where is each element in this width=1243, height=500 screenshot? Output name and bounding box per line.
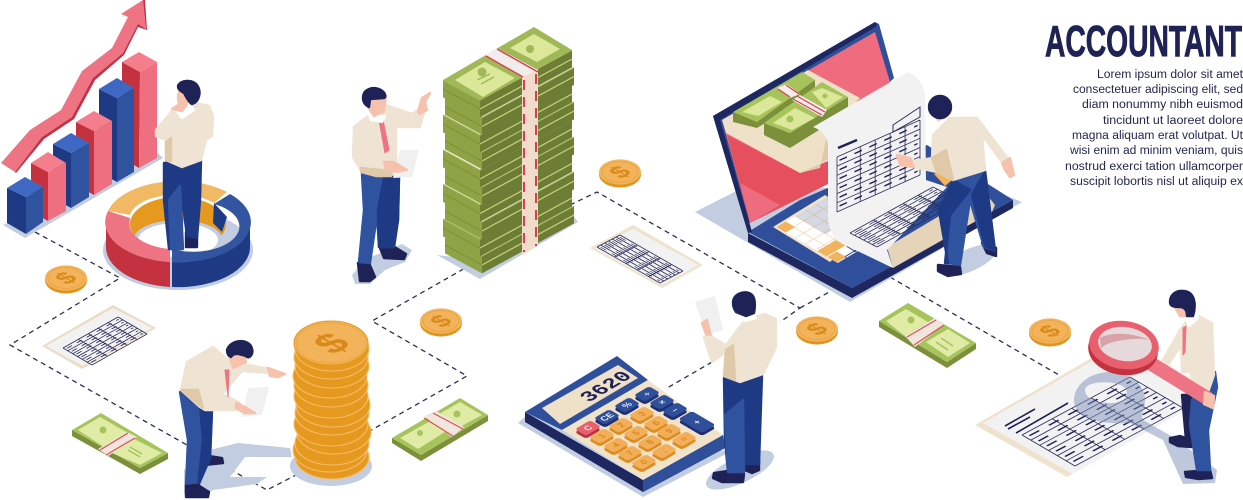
legs — [1170, 436, 1192, 447]
torso — [1163, 313, 1214, 395]
person: reading paper by calculator — [695, 292, 779, 497]
money bundle: bottom left — [72, 413, 168, 474]
magnifier shadow — [1074, 372, 1217, 484]
person: pointing at coins — [180, 341, 292, 498]
key labels: 2 — [615, 421, 627, 429]
invoice paper — [813, 72, 995, 268]
paper band — [905, 318, 945, 347]
coin 1 — [45, 265, 87, 294]
strap — [522, 69, 538, 255]
body text block: nostrud exerci tation ullamcorper — [1065, 161, 1243, 173]
bar 4 — [76, 111, 112, 195]
key labels: . — [659, 448, 669, 454]
body text block: tincidunt ut laoreet dolore — [1103, 115, 1243, 127]
keypad — [575, 386, 716, 473]
key labels: 5 — [630, 429, 642, 437]
display — [542, 365, 638, 424]
person with magnifier — [1085, 291, 1217, 479]
bar 5 — [99, 78, 134, 182]
key labels: 3 — [636, 410, 648, 418]
keyboard — [773, 195, 889, 263]
keypad: C — [581, 424, 596, 432]
laptop lid — [713, 22, 894, 233]
document: small table left — [42, 305, 156, 369]
invoice lower table — [850, 187, 960, 247]
coin 1: $ — [50, 269, 84, 288]
invoice table — [837, 120, 920, 212]
coin 4: $ — [801, 320, 835, 339]
red segment — [105, 211, 170, 287]
key labels: = — [677, 435, 691, 443]
top note — [443, 27, 572, 100]
body text block: diam nonummy nibh euismod — [1082, 99, 1243, 111]
display: 3620 — [575, 368, 638, 406]
calculator face — [525, 356, 648, 430]
keypad: % — [619, 400, 635, 410]
coin 5 — [1029, 318, 1071, 346]
money bundle: bottom centre — [392, 398, 488, 461]
blue segment — [172, 194, 251, 287]
laptop base — [748, 145, 1013, 298]
person: presenting with paper — [352, 88, 430, 284]
key labels: 8 — [644, 438, 656, 446]
coin 2: $ — [425, 312, 459, 331]
paper band — [424, 411, 464, 437]
bar 3 — [53, 133, 89, 208]
document with magnifier shadow — [975, 340, 1218, 484]
coin 2 — [420, 308, 462, 336]
key labels: 9 — [663, 427, 675, 435]
money bundle: centre right — [879, 303, 976, 368]
person: reading invoice on laptop — [897, 96, 1014, 283]
bar 6 — [122, 52, 157, 168]
body text block: magna aliquam erat volutpat. Ut — [1072, 130, 1243, 142]
keypad: ÷ — [641, 390, 653, 398]
coin stack — [290, 321, 372, 486]
keypad: − — [668, 406, 682, 414]
body text block: Lorem ipsum dolor sit amet — [1097, 69, 1243, 81]
body text block: suscipit lobortis nisl ut aliquip ex — [1070, 176, 1243, 188]
key labels — [596, 410, 691, 466]
coin 3: $ — [604, 163, 638, 182]
laptop with invoice — [695, 22, 1022, 302]
table on document — [1022, 377, 1183, 466]
donut chart — [103, 181, 253, 290]
donut hole and yellow inner wall — [130, 197, 226, 251]
coin 5: $ — [1034, 322, 1068, 341]
person: thinking on donut — [156, 81, 213, 249]
paper band — [98, 432, 137, 456]
magnifying glass — [1085, 316, 1214, 408]
key labels: 7 — [624, 449, 636, 457]
calculator — [518, 356, 730, 497]
coin 4 — [796, 316, 838, 344]
calculator side — [525, 412, 725, 492]
body text block: wisi enim ad minim veniam, quis — [1069, 145, 1243, 157]
body text block — [1065, 69, 1243, 188]
bar 1 — [7, 177, 43, 234]
coin stack: $ — [303, 327, 360, 360]
key labels: 6 — [650, 419, 662, 427]
orange keys beyond — [934, 170, 952, 186]
body text block: consectetuer adipiscing elit, sed — [1073, 84, 1243, 96]
yellow segment — [108, 181, 227, 215]
bar chart with rising arrow — [1, 0, 163, 238]
key rows — [776, 197, 889, 263]
keypad: + — [690, 418, 704, 426]
document: small table centre — [590, 225, 703, 288]
key labels: 0 — [638, 458, 650, 466]
dashed connector lines — [10, 192, 1059, 490]
key labels: 4 — [610, 441, 622, 449]
keypad: × — [655, 398, 669, 406]
rising arrow — [1, 0, 147, 173]
money stack — [437, 27, 578, 279]
bar 2 — [31, 152, 66, 221]
coin 3 — [599, 159, 641, 188]
cash on screen — [733, 72, 848, 148]
keypad: CE — [597, 411, 617, 423]
key labels: 1 — [596, 432, 608, 440]
